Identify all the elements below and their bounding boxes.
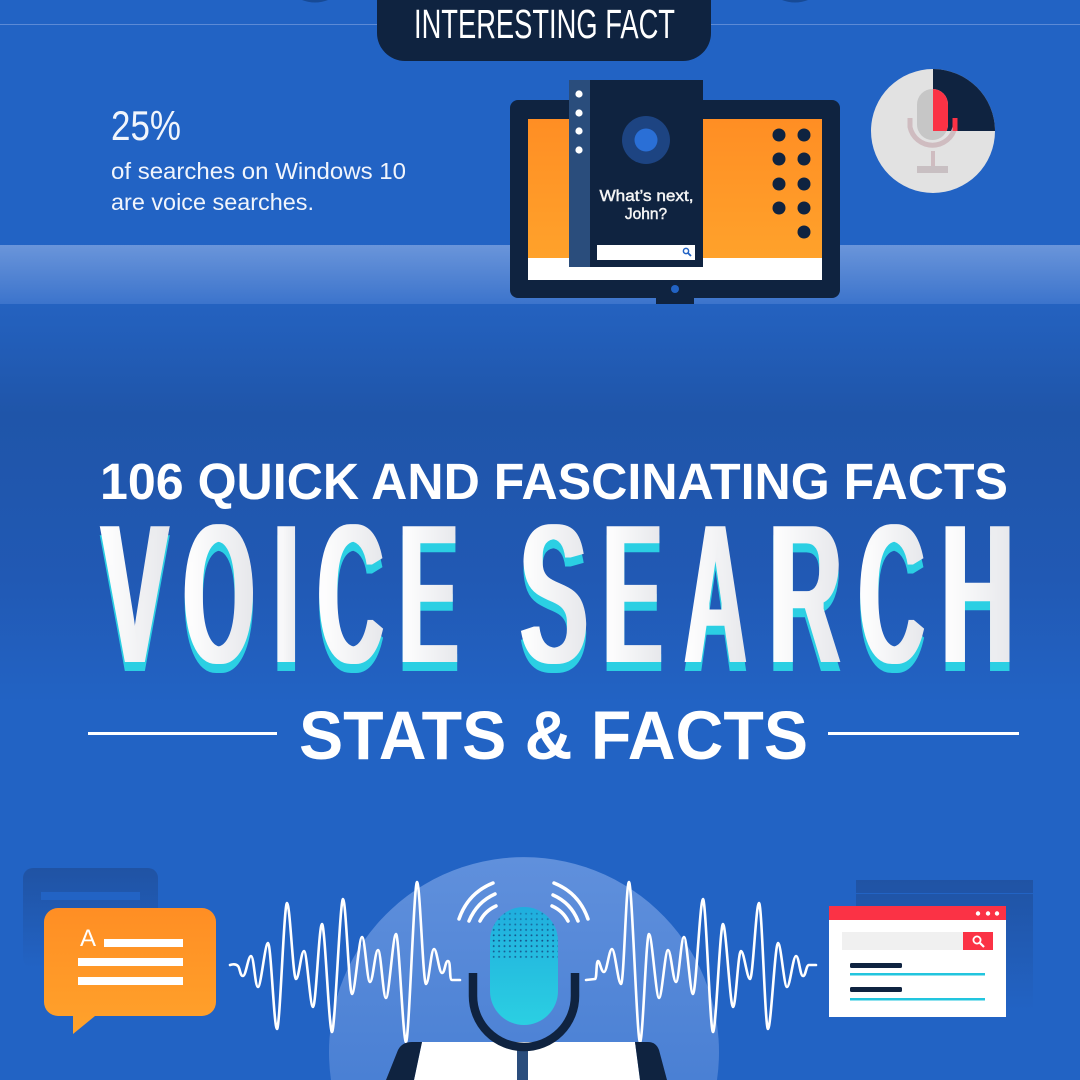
title: voice search: A [684, 479, 747, 709]
title: voice search [100, 479, 1014, 719]
title: voice search: E [399, 488, 458, 718]
icon: search results window [829, 880, 1033, 1017]
title: voice search: I [274, 479, 298, 709]
title: voice search: S [520, 489, 588, 718]
chart: right sound wave [586, 882, 816, 1042]
title: voice search: C [859, 488, 925, 718]
chart: pie with microphone [871, 69, 995, 193]
icon: monitor with assistant panel: John? [625, 206, 667, 223]
title: voice search: V [100, 489, 169, 718]
icon: translucent dome [329, 857, 719, 1080]
title: voice search: O [183, 479, 254, 709]
title: voice search: R [769, 480, 842, 709]
title: voice search: C [318, 488, 384, 718]
title: voice search: E [603, 488, 662, 718]
title: voice search: S [520, 480, 588, 709]
title: voice search: I [274, 488, 298, 718]
title: voice search: R [769, 489, 842, 718]
badge: interesting fact [377, 0, 711, 61]
icon: chat bubble [23, 868, 216, 1034]
chart: left sound wave [230, 882, 460, 1042]
title: voice search: V [100, 480, 169, 709]
title: voice search: C [318, 479, 384, 709]
title: voice search: H [941, 479, 1014, 710]
subtitle: stats and facts [88, 697, 1019, 774]
stat text: 25 percent: of searches on Windows 10 [111, 158, 406, 184]
title: voice search: O [183, 488, 254, 718]
title: voice search: H [941, 488, 1014, 719]
stat text: 25 percent [111, 102, 406, 215]
subtitle: stats and facts: STATS & FACTS [299, 697, 808, 774]
title: voice search: E [603, 479, 662, 709]
title: voice search: A [684, 488, 747, 718]
title: voice search: E [399, 479, 458, 709]
badge: interesting fact: INTERESTING FACT [414, 1, 675, 47]
icon: monitor with assistant panel [510, 80, 840, 304]
stat text: 25 percent: are voice searches. [111, 189, 314, 215]
icon: chat bubble: A [80, 925, 96, 952]
heading: 106 quick and fascinating facts: 106 QUICK AND FASCINATING FACTS [100, 453, 1008, 510]
icon: monitor with assistant panel: What’s next, [600, 188, 694, 205]
stat text: 25 percent: 25% [111, 102, 181, 149]
icon: microphone [386, 883, 667, 1080]
title: voice search: C [859, 479, 925, 709]
